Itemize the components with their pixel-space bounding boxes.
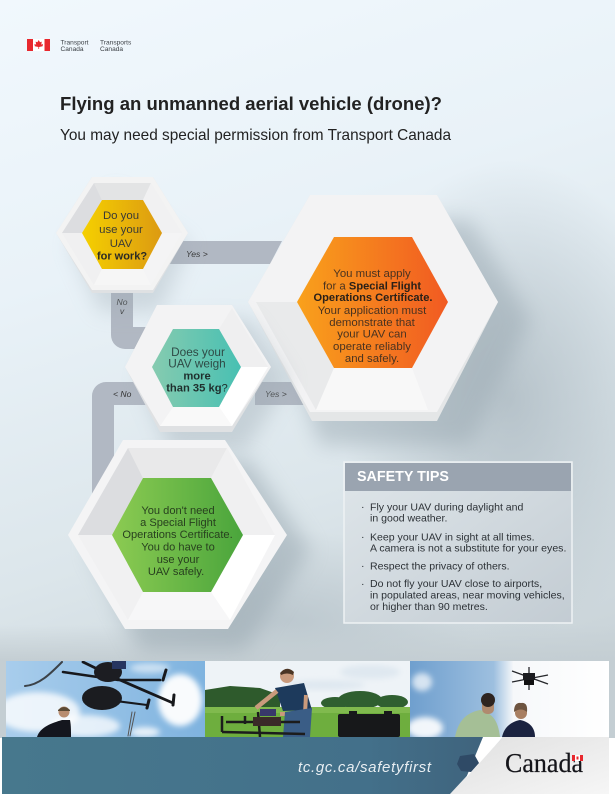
hexagon: does your UAV weigh more than 35 kg: than 35 kg?	[166, 382, 228, 394]
hexagon: no certificate needed: Operations Certificate.	[122, 529, 233, 541]
Transport Canada signature: Canada	[60, 46, 84, 53]
connector: yes from work question	[160, 241, 282, 264]
connector: yes from work question: Yes >	[186, 249, 208, 259]
hexagon: special flight certificate required: your UAV can	[337, 328, 407, 340]
hexagon: do you use your UAV for work: Do you	[103, 210, 139, 222]
hexagon: special flight certificate required: You must apply	[333, 268, 411, 280]
hexagon: no certificate needed: a Special Flight	[140, 517, 216, 529]
safety tips list: ·	[361, 501, 365, 513]
hexagon: no certificate needed	[68, 440, 310, 650]
Transport Canada signature: Canada	[100, 46, 123, 53]
footer diagonal white stripe	[466, 737, 503, 778]
photo: drone overhead with pilot	[0, 661, 205, 737]
hexagon: do you use your UAV for work: for work?	[97, 250, 147, 262]
footer gray panel	[450, 737, 609, 794]
hexagon: does your UAV weigh more than 35 kg	[125, 305, 290, 450]
hexagon: special flight certificate required: and safely.	[345, 353, 399, 365]
connector: yes from weight question: Yes >	[265, 389, 287, 399]
connector: no from work question: No	[116, 297, 128, 307]
hexagon: no certificate needed: UAV safely.	[148, 566, 204, 578]
hexagon: special flight certificate required: demonstrate that	[329, 317, 416, 329]
connector: yes from weight question	[255, 382, 315, 405]
safety tips list: ·	[361, 560, 365, 572]
hexagon: special flight certificate required	[248, 195, 530, 445]
hexagon: special flight certificate required: operate reliably	[333, 341, 411, 353]
hexagon: does your UAV weigh more than 35 kg: UAV weigh	[168, 356, 226, 370]
connector: no from weight question: < No	[113, 389, 132, 399]
Canada wordmark: Canada	[505, 747, 583, 778]
Transport Canada signature: Transports	[100, 40, 132, 46]
footer dark hexagon	[457, 754, 479, 772]
hexagon: no certificate needed: You don't need	[141, 505, 215, 517]
hexagon: does your UAV weigh more than 35 kg: more	[183, 370, 211, 382]
title: Flying an unmanned aerial vehicle (drone)?	[60, 93, 442, 114]
safety tips list: in populated areas, near moving vehicles,	[370, 590, 565, 602]
photo: man assembling drone in field	[205, 661, 410, 737]
hexagon: special flight certificate required: Operations Certificate.	[314, 292, 432, 304]
safety tips list	[361, 501, 566, 613]
hexagon: does your UAV weigh more than 35 kg: Does your	[171, 345, 225, 359]
photo: two people flying a drone	[407, 661, 609, 739]
hexagon: do you use your UAV for work	[56, 177, 190, 312]
safety tips list: Do not fly your UAV close to airports,	[370, 578, 542, 590]
footer url: tc.gc.ca/safetyfirst	[298, 759, 432, 776]
hexagon: special flight certificate required: Your application must	[318, 305, 427, 317]
safety tips list: ·	[361, 578, 365, 590]
Transport Canada signature	[27, 39, 132, 53]
hexagon: no certificate needed: You do have to	[141, 542, 215, 554]
safety tips list: Keep your UAV in sight at all times.	[370, 532, 535, 544]
footer band	[2, 737, 609, 794]
Transport Canada signature: Transport	[60, 40, 89, 46]
safety tips list: in good weather.	[370, 512, 447, 524]
hexagon: special flight certificate required: for a Special Flight	[323, 280, 421, 292]
safety tips list: Respect the privacy of others.	[370, 560, 510, 572]
safety tips header	[345, 463, 571, 491]
hexagon: do you use your UAV for work: use your	[99, 224, 143, 236]
safety tips list: A camera is not a substitute for your eyes.	[370, 542, 566, 554]
hexagon: no certificate needed: use your	[157, 554, 200, 566]
connector: no from weight question	[92, 382, 150, 495]
connector: no from work question: v	[120, 306, 125, 316]
safety tips list: ·	[361, 531, 365, 543]
connector: no from work question	[111, 285, 160, 349]
safety tips header: SAFETY TIPS	[357, 469, 449, 485]
hexagon: do you use your UAV for work: UAV	[110, 238, 133, 250]
safety tips list: or higher than 90 metres.	[370, 601, 488, 613]
subtitle: You may need special permission from Transport Canada	[60, 127, 451, 144]
panel: safety tips	[344, 462, 572, 623]
safety tips list: Fly your UAV during daylight and	[370, 502, 524, 514]
